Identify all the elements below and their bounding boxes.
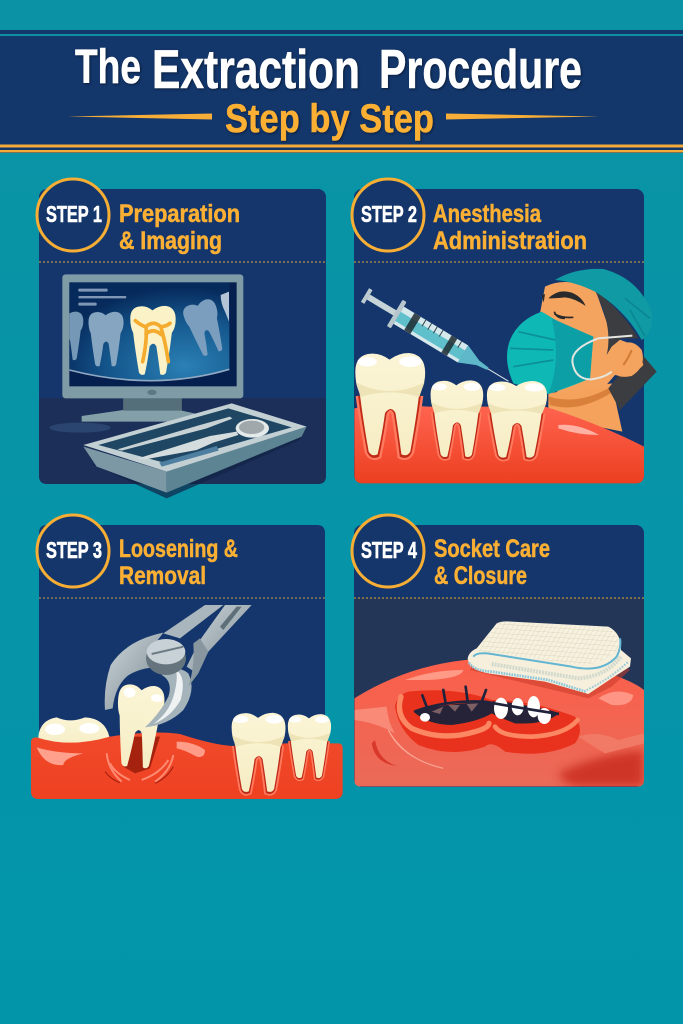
heading: step 2: Anesthesia xyxy=(433,200,542,228)
heading: step 4: & Closure xyxy=(434,562,527,590)
panel: step 3 xyxy=(31,515,343,799)
panel: step 2 xyxy=(352,179,657,483)
title: Procedure xyxy=(379,38,582,100)
illustration: gum with sutured socket xyxy=(354,658,644,787)
panel: step 4 xyxy=(352,515,644,787)
illustration: syringe xyxy=(357,282,516,394)
title: The xyxy=(75,41,141,94)
step badge 4: STEP 4 xyxy=(361,537,417,563)
heading: step 3: Loosening & xyxy=(119,535,238,563)
heading: step 4 xyxy=(434,535,550,590)
step badge 3: STEP 3 xyxy=(46,537,102,563)
panel: step 1 xyxy=(37,179,326,498)
illustration: extraction forceps xyxy=(105,605,252,727)
illustration: gum and teeth xyxy=(31,683,343,799)
illustration: folded gauze xyxy=(468,621,631,698)
title: Extraction xyxy=(152,38,360,100)
heading: step 2 xyxy=(433,200,587,255)
illustration: instrument tray xyxy=(83,403,307,498)
heading: step 1 xyxy=(119,200,240,255)
heading: step 1: Preparation xyxy=(119,200,240,228)
illustration: monitor with x-ray xyxy=(49,274,243,433)
heading: step 3: Removal xyxy=(119,562,206,590)
title xyxy=(75,38,582,100)
step badge 1: STEP 1 xyxy=(46,201,102,227)
header banner xyxy=(0,30,683,153)
illustration: gum and teeth xyxy=(354,353,644,483)
step badge 2 xyxy=(352,179,424,251)
step badge 3 xyxy=(37,515,109,587)
step badge 1 xyxy=(37,179,109,251)
step badge 2: STEP 2 xyxy=(361,201,417,227)
step badge 4 xyxy=(352,515,424,587)
heading: step 3 xyxy=(119,535,238,590)
heading: step 1: & Imaging xyxy=(119,227,222,255)
heading: step 2: Administration xyxy=(433,227,587,255)
illustration: dentist with mask xyxy=(507,269,657,432)
heading: step 4: Socket Care xyxy=(434,535,550,563)
subtitle: Step by Step xyxy=(225,97,434,141)
